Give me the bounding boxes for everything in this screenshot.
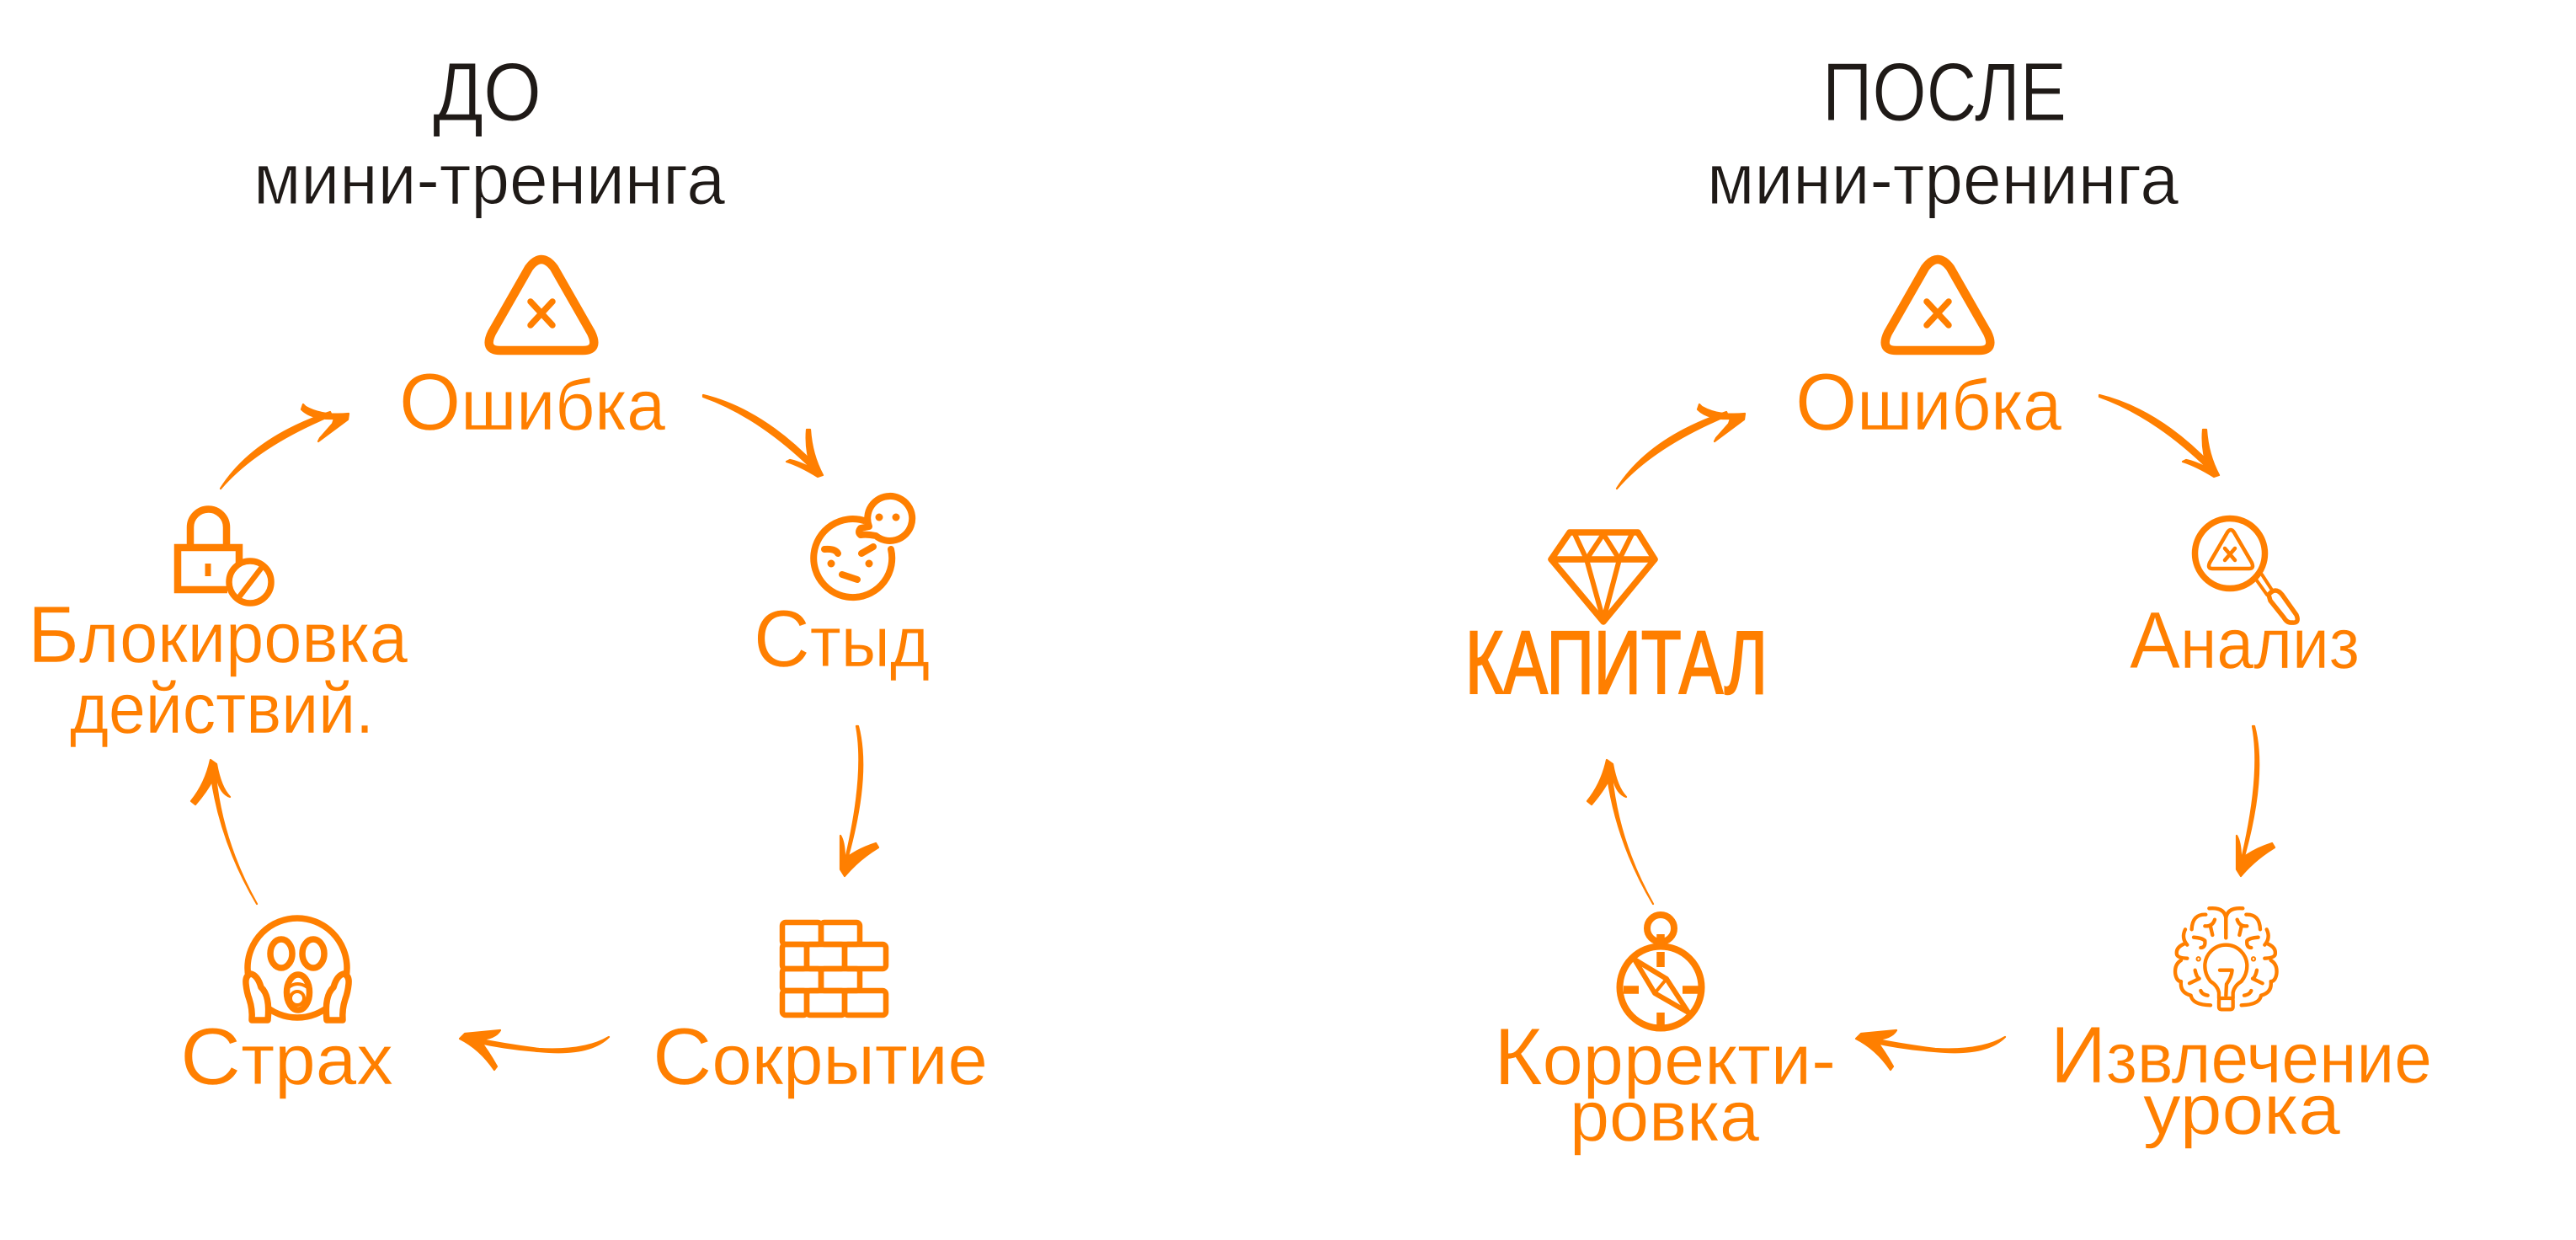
label: КАПИТАЛ: КАПИТАЛ bbox=[1465, 613, 1768, 713]
arrow: Ошибка to Анализ bbox=[2099, 395, 2219, 477]
icon: diamond bbox=[1551, 532, 1655, 622]
label: Сокрытие: Сокрытие bbox=[653, 1012, 988, 1102]
icon: padlock with prohibition sign bbox=[178, 509, 271, 603]
right hemisphere bbox=[2226, 908, 2277, 1005]
heading: ДО: ДО bbox=[433, 45, 541, 138]
arrow: Ошибка to Стыд bbox=[703, 395, 823, 477]
arrow: Стыд to Сокрытие bbox=[840, 726, 878, 876]
icon: brick wall bbox=[782, 922, 886, 1015]
label: Блокировка действий bbox=[28, 590, 408, 748]
arrow: Анализ to Извлечение урока bbox=[2237, 726, 2275, 876]
label: Анализ: Анализ bbox=[2130, 596, 2360, 686]
icon: compass bbox=[1620, 915, 1701, 1029]
label: Корректи-ровка: ровка bbox=[1570, 1077, 1759, 1156]
arrow: Блокировка to Ошибка bbox=[221, 404, 349, 489]
subheading: мини-тренинга: мини-тренинга bbox=[1707, 140, 2179, 220]
icon: error triangle bbox=[1885, 259, 1990, 350]
arrow: КАПИТАЛ to Ошибка bbox=[1617, 404, 1745, 489]
left hemisphere bbox=[2175, 908, 2226, 1005]
icon: shame face with speech bubble bbox=[813, 496, 912, 597]
label: Страх: Страх bbox=[180, 1012, 393, 1102]
label: Ошибка: Ошибка bbox=[1795, 357, 2061, 447]
label: Блокировка действий: Блокировка bbox=[28, 590, 408, 680]
label: Извлечение урока: Извлечение bbox=[2051, 1010, 2432, 1100]
icon: brain with light bulb bbox=[2175, 908, 2277, 1009]
label: Извлечение урока: урока bbox=[2143, 1070, 2340, 1149]
arrow: Корректировка to КАПИТАЛ bbox=[1587, 760, 1653, 904]
heading: ПОСЛЕ: ПОСЛЕ bbox=[1822, 45, 2067, 138]
arrow: Извлечение урока to Корректировка bbox=[1856, 1030, 2005, 1070]
label: Извлечение урока bbox=[2051, 1010, 2432, 1149]
label: Корректи-ровка: Корректи- bbox=[1494, 1012, 1836, 1102]
label: Корректи-ровка bbox=[1494, 1012, 1836, 1156]
panel: after mini-training cycle bbox=[1465, 45, 2432, 1156]
light bulb bbox=[2198, 945, 2254, 1009]
label: Стыд: Стыд bbox=[754, 594, 930, 684]
arrow: Страх to Блокировка действий bbox=[191, 760, 257, 904]
icon: screaming face bbox=[246, 918, 349, 1020]
panel: before mini-training cycle bbox=[28, 45, 988, 1102]
icon: magnifier over error triangle bbox=[2195, 519, 2297, 623]
arrow: Сокрытие to Страх bbox=[460, 1030, 609, 1070]
label: Ошибка: Ошибка bbox=[399, 357, 665, 447]
label: Блокировка действий: действий. bbox=[70, 669, 374, 748]
subheading: мини-тренинга: мини-тренинга bbox=[253, 140, 726, 220]
icon: error triangle bbox=[489, 259, 594, 350]
